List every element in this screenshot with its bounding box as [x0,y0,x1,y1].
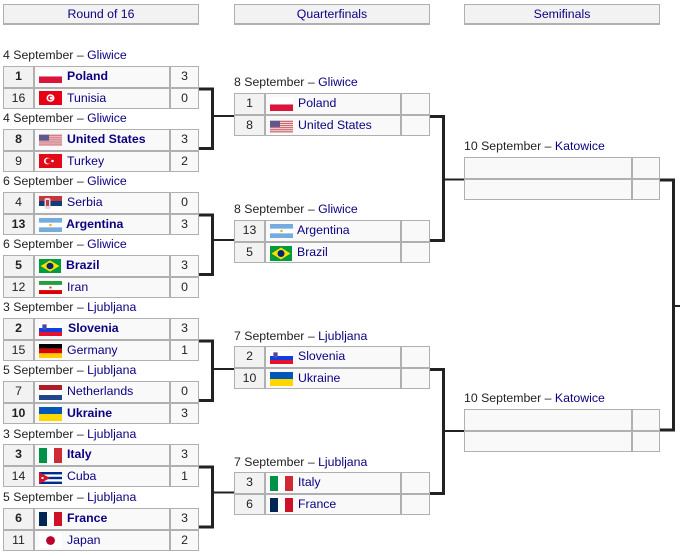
match: Italy vs Cuba: 3 [15,447,22,461]
heading: Semifinals [464,4,660,25]
match: Netherlands vs Ukraine: 0 [181,384,188,398]
match: Slovenia vs Germany: 2 [15,321,22,335]
match: quarterfinal Poland vs United States: 1 [246,96,253,110]
match: quarterfinal Slovenia vs Ukraine: Ukraine [298,371,340,385]
date: match 8: 5 September – Ljubljana [3,490,136,504]
match: quarterfinal Argentina vs Brazil: Argentina [297,223,350,237]
match: Poland vs Tunisia: 0 [181,91,188,105]
connector: round of 16 to quarterfinal 3 [199,340,234,402]
match: Poland vs Tunisia [3,66,199,109]
match: Poland vs Tunisia: 16 [12,91,25,105]
date: quarterfinal 3: 7 September – Ljubljana [234,329,367,343]
match: Serbia vs Argentina: 13 [12,217,25,231]
match: Poland vs Tunisia: Tunisia [67,91,106,105]
match: Brazil vs Iran: Brazil [66,258,100,272]
match: Slovenia vs Germany: 1 [181,343,188,357]
match: United States vs Turkey: 2 [181,154,188,168]
match: Brazil vs Iran: 12 [12,280,25,294]
connector: round of 16 to quarterfinal 4 [199,466,234,528]
heading: Round of 16: Round of 16 [67,7,134,21]
match: Italy vs Cuba: 14 [12,469,25,483]
match: Netherlands vs Ukraine: Netherlands [67,384,133,398]
match: Serbia vs Argentina: 0 [181,195,188,209]
match: France vs Japan: 3 [181,511,188,525]
match: Italy vs Cuba: 3 [181,447,188,461]
date: match 1: 4 September – Gliwice [3,48,127,62]
match: quarterfinal Slovenia vs Ukraine: Slovenia [298,349,345,363]
match: Italy vs Cuba: Cuba [67,469,96,483]
match: Serbia vs Argentina: 3 [181,217,188,231]
match: France vs Japan: 6 [15,511,22,525]
heading: Semifinals: Semifinals [534,7,590,21]
match: Serbia vs Argentina: Serbia [67,195,103,209]
match: quarterfinal Italy vs France: 3 [246,475,253,489]
match: Brazil vs Iran: 0 [181,280,188,294]
date: quarterfinal 4: 7 September – Ljubljana [234,455,367,469]
match: semifinal 1 (empty) [464,157,660,200]
match: quarterfinal Slovenia vs Ukraine [234,346,430,389]
match: quarterfinal Italy vs France [234,472,430,515]
match: quarterfinal Slovenia vs Ukraine: 2 [246,349,253,363]
heading: Quarterfinals: Quarterfinals [297,7,367,21]
match: semifinal 2 (empty) [464,409,660,452]
date: match 5: 3 September – Ljubljana [3,300,136,314]
match: United States vs Turkey: 9 [15,154,22,168]
match: Slovenia vs Germany: 3 [181,321,188,335]
match: quarterfinal Poland vs United States: Poland [298,96,336,110]
date: match 6: 5 September – Ljubljana [3,363,136,377]
match: France vs Japan: Japan [67,533,101,547]
match: Netherlands vs Ukraine [3,381,199,424]
date: semifinal 2: 10 September – Katowice [464,391,605,405]
match: Slovenia vs Germany [3,318,199,361]
heading: Round of 16 [3,4,199,25]
connector: semifinals to final [660,178,680,432]
date: match 2: 4 September – Gliwice [3,111,127,125]
connector: round of 16 to quarterfinal 2 [199,214,234,276]
match: quarterfinal Italy vs France: 6 [246,497,253,511]
match: France vs Japan: 2 [181,533,188,547]
match: Italy vs Cuba [3,444,199,487]
match: Brazil vs Iran: 3 [181,258,188,272]
match: Brazil vs Iran: Iran [67,280,88,294]
match: Brazil vs Iran: 5 [15,258,22,272]
match: Netherlands vs Ukraine: 10 [12,406,25,420]
match: Slovenia vs Germany: 15 [12,343,25,357]
match: quarterfinal Argentina vs Brazil: 5 [246,245,253,259]
match: France vs Japan: 11 [12,533,25,547]
match: Brazil vs Iran [3,255,199,298]
date: match 7: 3 September – Ljubljana [3,427,136,441]
date: match 3: 6 September – Gliwice [3,174,127,188]
date: quarterfinal 2: 8 September – Gliwice [234,202,358,216]
match: Slovenia vs Germany: Slovenia [68,321,119,335]
connector: round of 16 to quarterfinal 1 [199,88,234,150]
match: Serbia vs Argentina: Argentina [66,217,123,231]
heading: Quarterfinals [234,4,430,25]
match: Netherlands vs Ukraine: Ukraine [67,406,112,420]
match: quarterfinal Argentina vs Brazil: Brazil [297,245,328,259]
match: United States vs Turkey: 3 [181,132,188,146]
date: quarterfinal 1: 8 September – Gliwice [234,75,358,89]
match: Poland vs Tunisia: 3 [181,69,188,83]
connector: quarterfinals to semifinal 1 [430,115,464,242]
match: Poland vs Tunisia: Poland [67,69,108,83]
match: Poland vs Tunisia: 1 [15,69,22,83]
match: quarterfinal Italy vs France: Italy [298,475,321,489]
match: Italy vs Cuba: 1 [181,469,188,483]
match: Serbia vs Argentina: 4 [15,195,22,209]
date: semifinal 1: 10 September – Katowice [464,139,605,153]
match: France vs Japan [3,508,199,551]
match: Slovenia vs Germany: Germany [67,343,118,357]
match: quarterfinal Slovenia vs Ukraine: 10 [243,371,256,385]
date: match 4: 6 September – Gliwice [3,237,127,251]
match: Netherlands vs Ukraine: 3 [181,406,188,420]
match: quarterfinal Poland vs United States [234,93,430,136]
match: quarterfinal Argentina vs Brazil [234,220,430,263]
match: Netherlands vs Ukraine: 7 [15,384,22,398]
match: United States vs Turkey: 8 [15,132,22,146]
match: Serbia vs Argentina [3,192,199,235]
match: United States vs Turkey [3,129,199,172]
match: United States vs Turkey: Turkey [67,154,104,168]
match: quarterfinal Poland vs United States: 8 [246,118,253,132]
match: quarterfinal Poland vs United States: United States [298,118,372,132]
connector: quarterfinals to semifinal 2 [430,368,464,495]
match: quarterfinal Italy vs France: France [298,497,336,511]
match: quarterfinal Argentina vs Brazil: 13 [243,223,256,237]
match: United States vs Turkey: United States [67,132,146,146]
match: Italy vs Cuba: Italy [67,447,92,461]
match: France vs Japan: France [67,511,107,525]
